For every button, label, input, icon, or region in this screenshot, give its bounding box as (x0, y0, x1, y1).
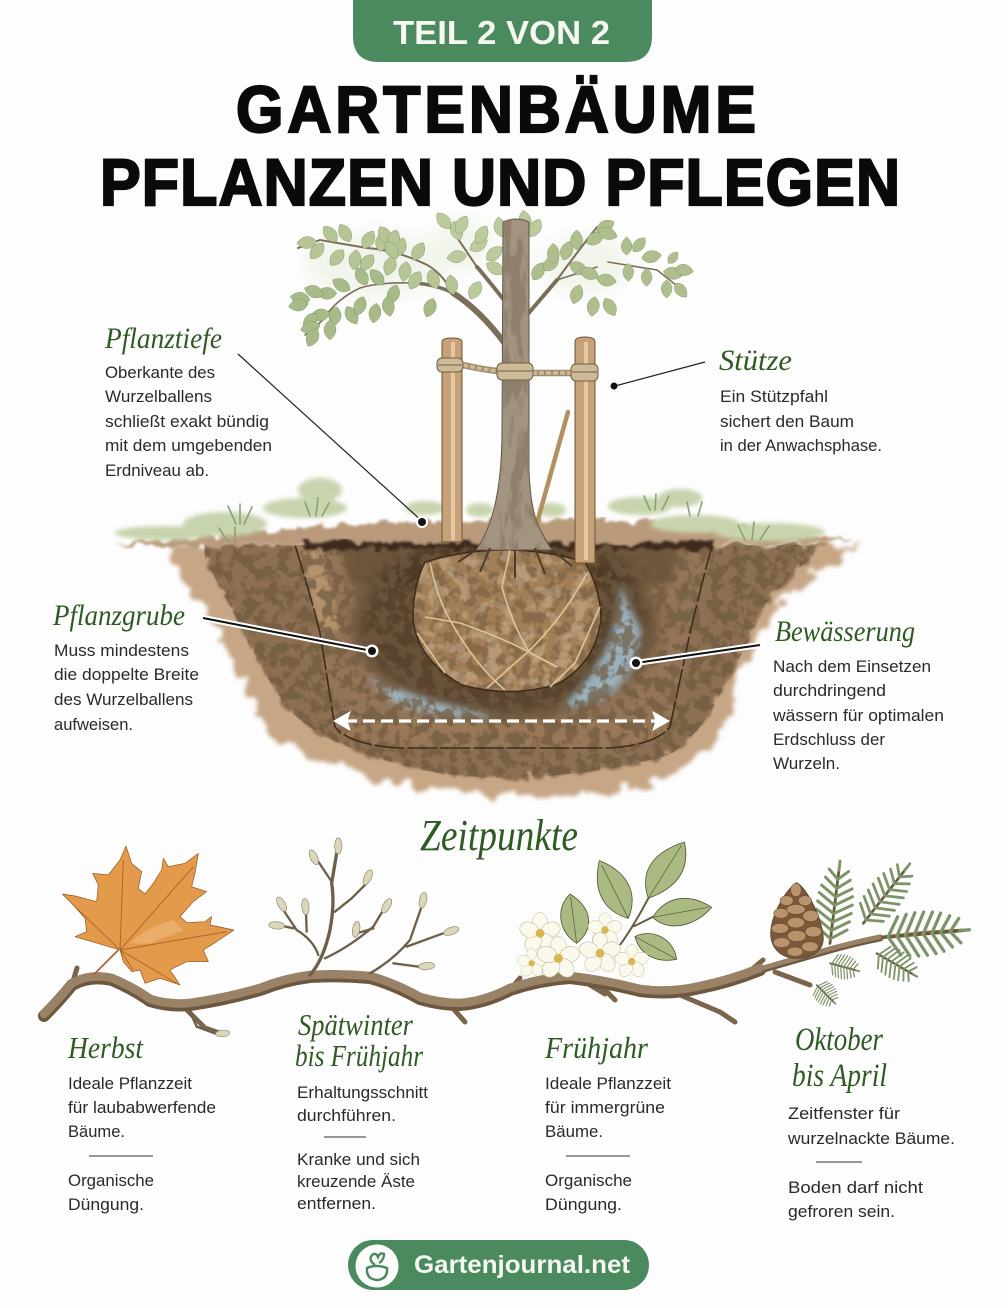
callout: Bewässerung: Erdschluss der (773, 730, 885, 749)
callout: Bewässerung: Bewässerung (775, 615, 915, 648)
callout: Bewässerung (630, 615, 944, 773)
callout: Pflanztiefe: Erdniveau ab. (105, 461, 209, 480)
column: Frühjahr: Frühjahr (544, 1030, 649, 1065)
water (365, 580, 642, 717)
callout: Pflanztiefe: schließt exakt bündig (105, 412, 269, 431)
outer soil (172, 545, 858, 794)
icon: spring flowers and leaves (516, 842, 712, 981)
dimension arrow (334, 712, 669, 730)
callout: Pflanzgrube: aufweisen. (54, 715, 133, 734)
leaf wash (305, 220, 630, 297)
callout: Stütze: Ein Stützpfahl (720, 387, 828, 406)
callout: Stütze: sichert den Baum (720, 412, 854, 431)
icon: pine cone and needles (771, 853, 971, 1012)
column: Herbst (67, 1030, 216, 1214)
illustration: grass patches (115, 478, 825, 542)
callout: Bewässerung: Wurzeln. (773, 754, 840, 773)
column: Spätwinter bis Frühjahr: durchführen. (297, 1106, 396, 1125)
timeline branch (44, 930, 960, 1034)
column: Frühjahr: Bäume. (545, 1122, 603, 1141)
illustration: tree (288, 209, 694, 578)
column: Spätwinter bis Frühjahr: kreuzende Äste (297, 1172, 415, 1191)
top badge: Teil 2 von 2 (353, 0, 652, 62)
column: Herbst: für laubabwerfende (68, 1098, 216, 1117)
column: Oktober bis April: Boden darf nicht (788, 1178, 923, 1197)
column: Spätwinter bis Frühjahr (295, 1007, 428, 1213)
column: Herbst: Bäume. (68, 1122, 125, 1141)
column: Oktober bis April: gefroren sein. (788, 1202, 895, 1221)
column: Oktober bis April (787, 1022, 955, 1221)
heading: Zeitpunkte: Zeitpunkte (420, 811, 578, 860)
column: Spätwinter bis Frühjahr: entfernen. (297, 1194, 376, 1213)
column: Frühjahr (544, 1030, 671, 1214)
callout: Pflanztiefe: Pflanztiefe (104, 322, 222, 355)
column: Spätwinter bis Frühjahr: Spätwinter (298, 1007, 414, 1042)
column: Herbst: Ideale Pflanzzeit (68, 1074, 192, 1093)
icon: logo seedling (356, 1244, 398, 1288)
column: Oktober bis April: Oktober (795, 1022, 883, 1058)
column: Frühjahr: Organische (545, 1171, 632, 1190)
column: Herbst: Herbst (67, 1030, 144, 1065)
callout: Pflanzgrube: Muss mindestens (54, 641, 189, 660)
callout: Pflanzgrube: des Wurzelballens (54, 690, 193, 709)
surface (112, 520, 855, 547)
footer badge: Gartenjournal.net (414, 1251, 631, 1279)
column: Oktober bis April: Zeitfenster für (788, 1104, 900, 1123)
icon: winter twig with buds (190, 838, 460, 1037)
callout: Pflanzgrube: Pflanzgrube (52, 599, 185, 632)
title (100, 74, 900, 220)
stakes (442, 337, 595, 563)
callout: Pflanztiefe: Wurzelballens (105, 387, 212, 406)
column: Spätwinter bis Frühjahr: Kranke und sich (297, 1150, 420, 1169)
leaves (288, 209, 694, 349)
footer badge (348, 1240, 649, 1290)
pit interior (295, 545, 712, 748)
callout: Stütze: in der Anwachsphase. (720, 436, 882, 455)
column: Spätwinter bis Frühjahr: Erhaltungsschnitt (297, 1083, 428, 1102)
callout: Bewässerung: durchdringend (773, 681, 886, 700)
callout: Pflanztiefe: mit dem umgebenden (105, 436, 272, 455)
pit texture (295, 545, 712, 748)
trunk (458, 219, 572, 578)
column: Oktober bis April: bis April (792, 1058, 887, 1094)
column: Herbst: Düngung. (68, 1195, 144, 1214)
rope ties (437, 358, 598, 381)
illustration: root ball (413, 550, 601, 692)
icon: maple leaf (62, 846, 234, 985)
callout: Pflanztiefe: Oberkante des (105, 363, 215, 382)
callout: Bewässerung: Nach dem Einsetzen (773, 657, 931, 676)
callout: Bewässerung: wässern für optimalen (772, 706, 944, 725)
pit shadow (298, 545, 682, 722)
column: Frühjahr: Düngung. (545, 1195, 622, 1214)
callout: Pflanztiefe (104, 322, 428, 528)
illustration: soil cross-section (112, 520, 858, 794)
title: GARTENBÄUME (236, 74, 756, 147)
mid soil (205, 545, 825, 778)
callout: Stütze (610, 344, 882, 455)
callout: Stütze: Stütze (719, 344, 792, 377)
column: Herbst: Organische (68, 1171, 154, 1190)
top badge: Teil 2 von 2: TEIL 2 VON 2 (393, 14, 610, 51)
callout: Pflanzgrube (52, 599, 378, 734)
column: Frühjahr: für immergrüne (545, 1098, 665, 1117)
callout: Pflanzgrube: die doppelte Breite (54, 665, 199, 684)
column: Oktober bis April: wurzelnackte Bäume. (787, 1129, 955, 1148)
column: Spätwinter bis Frühjahr: bis Frühjahr (295, 1038, 424, 1073)
column: Frühjahr: Ideale Pflanzzeit (545, 1074, 671, 1093)
title: PFLANZEN UND PFLEGEN (100, 147, 900, 220)
branches (298, 227, 686, 345)
